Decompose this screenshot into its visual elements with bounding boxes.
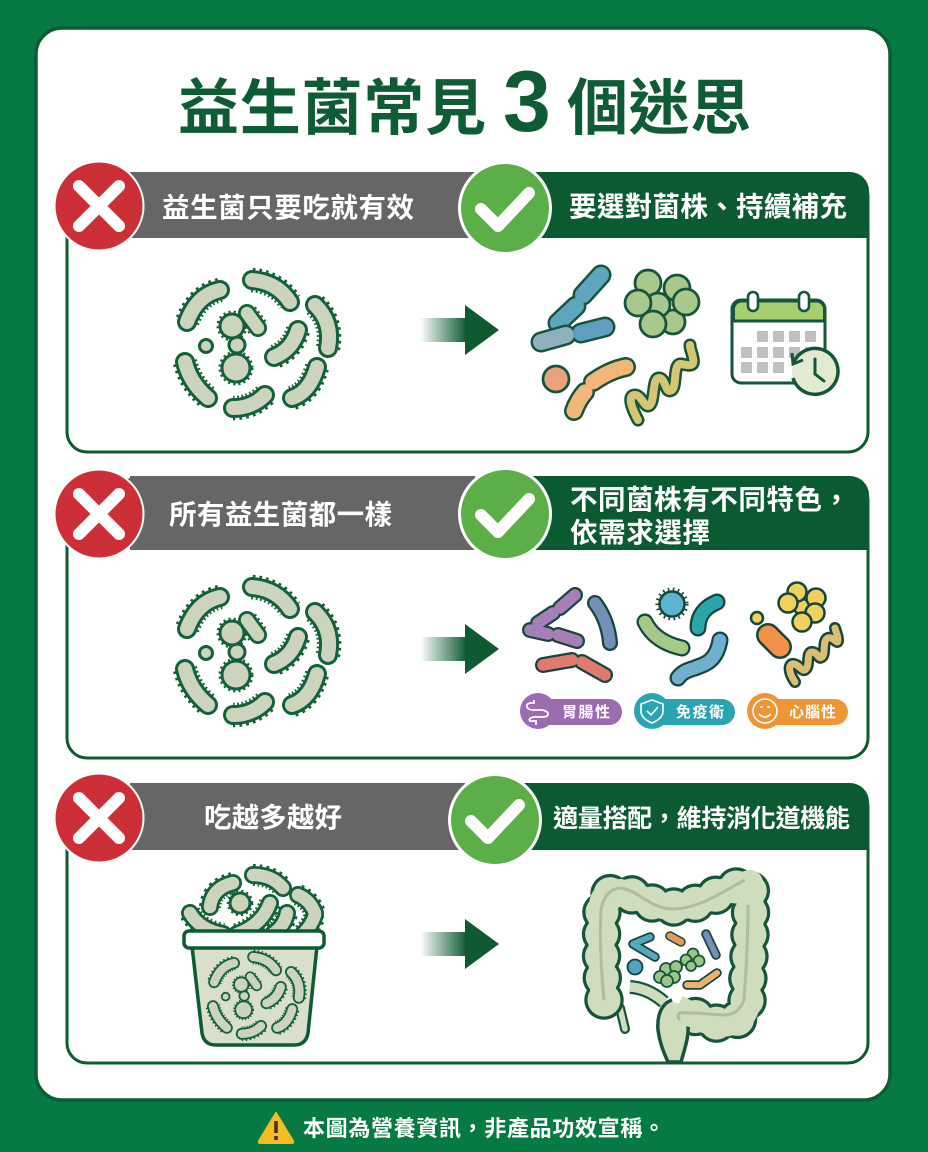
pill: immune: 免疫衛 xyxy=(676,703,724,721)
fact bar 2 xyxy=(530,476,869,550)
colon join xyxy=(672,1012,702,1020)
panel 3 xyxy=(54,772,869,1063)
yellow and orange heart strains xyxy=(751,582,838,682)
appendix xyxy=(620,1008,625,1029)
icon: red cross 3 xyxy=(54,772,144,864)
pill: heart and brain xyxy=(747,693,848,729)
purple and red gut strains xyxy=(530,595,610,675)
fact text 3: 適量搭配，維持消化道機能 xyxy=(553,804,850,833)
fact bar 1 xyxy=(530,172,869,238)
panel 2 xyxy=(54,467,869,758)
myth text 3: 吃越多越好 xyxy=(204,802,342,833)
colon crease xyxy=(600,880,748,1020)
arrow 1 xyxy=(420,305,499,355)
basket of bacteria xyxy=(184,875,324,1045)
icon: green check 1 xyxy=(458,161,552,255)
fact text 2: 依需求選擇 xyxy=(570,517,710,548)
icon: red cross 1 xyxy=(54,160,144,252)
arrow 3 xyxy=(420,919,499,969)
gut bacteria xyxy=(628,934,717,987)
fact bar 3 xyxy=(520,783,869,850)
icon: calendar with clock xyxy=(732,292,838,395)
pill: heart and brain: 心腦性 xyxy=(789,703,836,721)
bacteria cluster 2 xyxy=(185,587,329,715)
panel 1 xyxy=(54,160,869,452)
bacteria inside basket xyxy=(213,957,299,1034)
basket rim xyxy=(184,931,324,948)
intestine xyxy=(600,880,751,1062)
fact text 2 xyxy=(570,484,850,548)
title: 益生菌常見 xyxy=(178,74,486,142)
icon: red cross 2 xyxy=(54,468,144,560)
icon: green check 3 xyxy=(448,773,542,867)
terminal ileum xyxy=(630,987,664,1002)
pill: gut: 胃腸性 xyxy=(562,704,610,721)
title: 3 xyxy=(503,54,551,150)
colon tube xyxy=(602,883,751,1024)
myth bar 3 xyxy=(130,783,465,850)
basket body xyxy=(192,946,317,1045)
title: 個迷思 xyxy=(567,74,751,142)
panel 2 frame xyxy=(67,480,868,758)
bacteria cluster 1 xyxy=(185,280,329,408)
myth bar 2 xyxy=(130,476,475,550)
fact text 1: 要選對菌株、持續補充 xyxy=(569,191,847,222)
panel 3 frame xyxy=(67,787,868,1063)
fact text 2: 不同菌株有不同特色， xyxy=(570,484,850,515)
rectum xyxy=(658,1000,688,1062)
pill: immune xyxy=(634,693,735,729)
pill: gut xyxy=(520,693,622,729)
footer disclaimer: 本圖為營養資訊，非產品功效宣稱。 xyxy=(303,1116,665,1141)
icon: green check 2 xyxy=(458,467,552,561)
arrow 2 xyxy=(420,624,499,674)
warning icon xyxy=(259,1113,293,1143)
heap of bacteria xyxy=(190,875,315,934)
myth text 1: 益生菌只要吃就有效 xyxy=(162,192,414,223)
assorted strains xyxy=(541,270,699,420)
title xyxy=(178,54,751,150)
myth bar 1 xyxy=(130,172,475,238)
teal immune strains xyxy=(645,589,720,678)
myth text 2: 所有益生菌都一樣 xyxy=(169,499,392,530)
panel 1 frame xyxy=(67,176,868,452)
